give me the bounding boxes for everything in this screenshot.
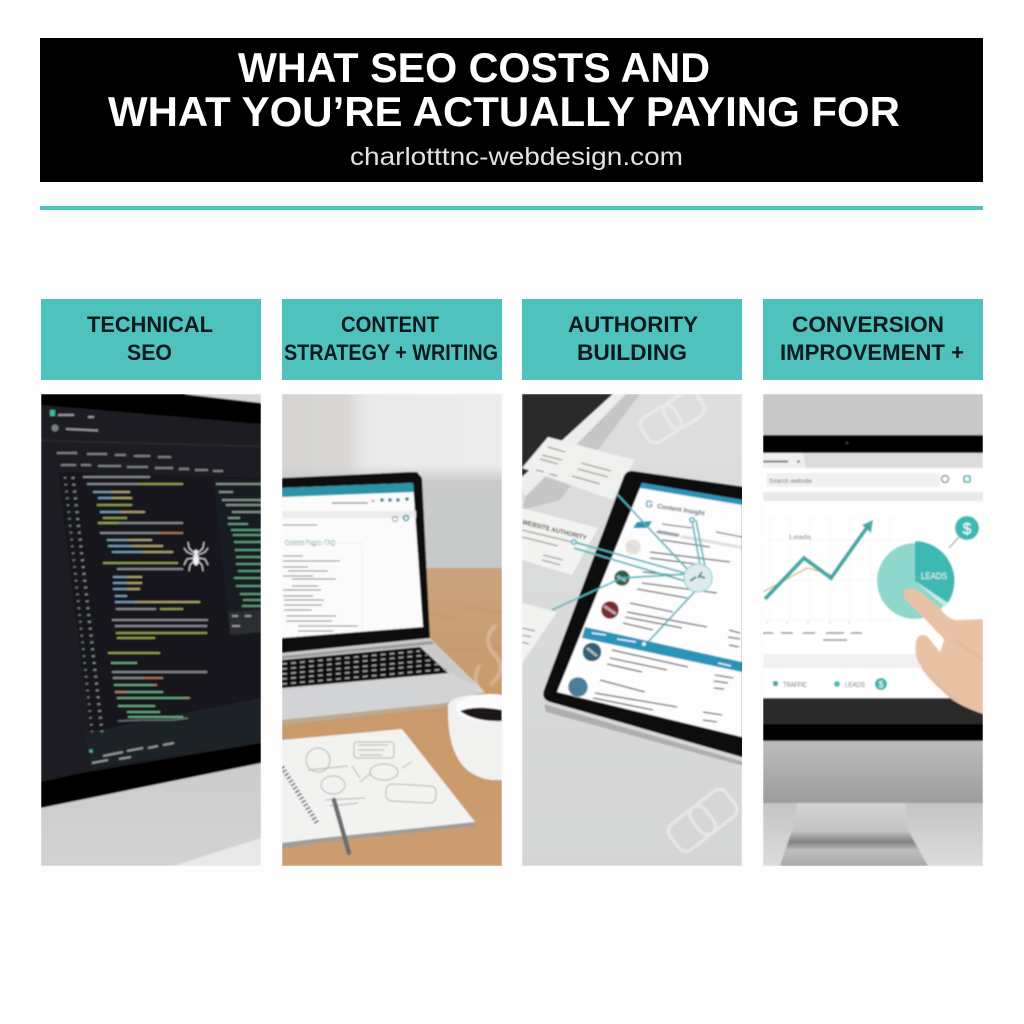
title banner	[40, 38, 983, 182]
link hub node	[684, 564, 712, 592]
column heading: conversion improvement +	[763, 299, 983, 380]
tablet bar labels	[592, 633, 731, 666]
coffee cup	[446, 692, 502, 782]
icon: dollar badge: $	[963, 521, 972, 538]
teal divider rule	[40, 206, 983, 210]
notebook sketches	[306, 742, 436, 806]
notebook spiral binding	[282, 767, 317, 823]
notebook	[282, 729, 475, 853]
monitor stand	[780, 803, 928, 866]
tablet heading	[633, 499, 706, 528]
laptop screen text lines	[283, 561, 358, 631]
tablet avatars	[568, 539, 641, 697]
pie chart	[877, 541, 955, 619]
tablet heading: G	[645, 499, 654, 511]
icon: spider	[184, 542, 208, 571]
column heading: technical seo: SEO	[127, 340, 172, 365]
pen	[334, 800, 349, 853]
icon: dollar badge	[949, 516, 979, 548]
column heading: technical seo	[41, 299, 261, 380]
sidebar code lines	[216, 484, 261, 626]
floating card 2: WEBSITE AUTHORITY	[522, 519, 588, 542]
column heading: authority building: BUILDING	[577, 340, 687, 365]
title: WHAT SEO COSTS AND	[238, 44, 710, 91]
hand pointing	[904, 588, 983, 714]
laptop	[282, 472, 485, 725]
browser tab and search bar: Search website	[769, 478, 812, 485]
line chart: Leads	[789, 534, 812, 541]
floating card 3	[522, 603, 557, 663]
column heading: content strategy + writing	[282, 299, 502, 380]
chart legend: LEADS	[845, 682, 865, 689]
chart legend: TRAFFIC	[783, 682, 807, 689]
steam	[475, 625, 500, 692]
line chart	[763, 519, 874, 642]
tablet	[543, 471, 745, 766]
title	[108, 44, 900, 135]
pie chart: LEADS	[921, 571, 947, 581]
tablet tabs	[662, 524, 742, 537]
column heading: content strategy + writing: STRATEGY + WRITING	[284, 340, 498, 365]
browser tab and search bar	[763, 462, 970, 487]
line numbers	[65, 477, 102, 732]
floating card 1	[522, 437, 635, 500]
column heading: technical seo: TECHNICAL	[87, 312, 213, 337]
chain link outline bottom	[667, 788, 738, 853]
bottom tabs	[89, 718, 188, 763]
laptop screen toolbar	[332, 497, 409, 522]
chain link outline top	[639, 394, 706, 444]
code lines	[83, 477, 208, 717]
chart legend: $	[878, 680, 884, 690]
floating card 2	[522, 508, 598, 575]
panel: authority building tablet	[522, 387, 745, 866]
app header icons	[50, 410, 58, 432]
website url: charlotttnc-webdesign.com	[350, 143, 683, 171]
connection lines	[552, 494, 706, 642]
laptop screen heading: Content Pages: FAQ	[285, 538, 335, 547]
tablet heading: Content Insight	[657, 503, 706, 518]
panel: technical seo code monitor	[41, 394, 261, 866]
column heading: authority building	[522, 299, 742, 380]
title: WHAT YOU’RE ACTUALLY PAYING FOR	[108, 88, 900, 135]
tablet list rows	[593, 540, 740, 722]
column heading: authority building: AUTHORITY	[568, 312, 698, 337]
column heading: conversion improvement +: IMPROVEMENT +	[780, 340, 964, 365]
panel: conversion dashboard monitor	[763, 394, 983, 866]
column heading: content strategy + writing: CONTENT	[341, 312, 440, 337]
chart legend	[773, 678, 887, 690]
column heading: conversion improvement +: CONVERSION	[792, 312, 944, 337]
panel: content laptop and notebook	[282, 394, 524, 866]
